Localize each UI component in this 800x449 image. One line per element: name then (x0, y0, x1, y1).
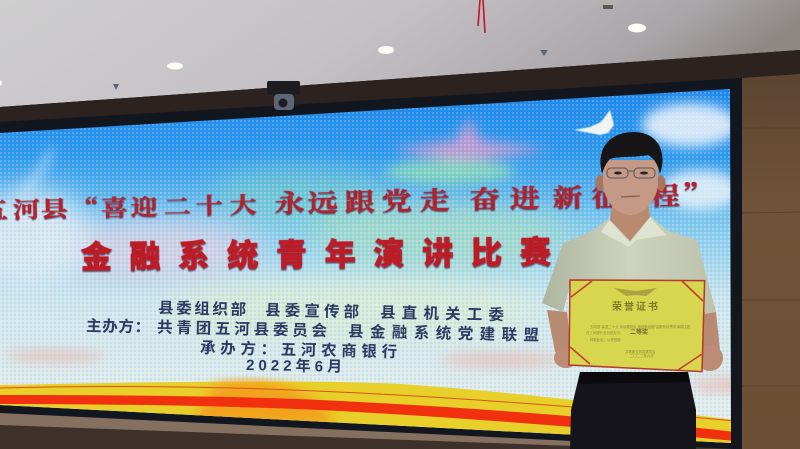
golden ribbons (0, 381, 735, 449)
host line: 主办方： (86, 316, 150, 336)
organisers line: 县直机关工委 (380, 304, 505, 324)
ears (596, 175, 604, 191)
wall right (742, 74, 800, 449)
organisers line: 县委组织部 (158, 298, 247, 319)
led dot pattern (0, 80, 735, 449)
red landscape (5, 349, 770, 393)
certificate corners (570, 281, 703, 370)
mouth (621, 196, 640, 197)
screen frame (0, 78, 742, 449)
projector (267, 81, 300, 110)
certificate emblem (614, 288, 657, 296)
forearms (547, 310, 572, 358)
certificate body (586, 324, 691, 358)
trousers (570, 372, 696, 449)
certificate heading: 荣誉证书 (612, 300, 658, 313)
screen title: 永远跟党走奋进新征程” (274, 174, 713, 219)
host line: 县金融系统党建联盟 (348, 321, 539, 344)
sprinklers (113, 50, 548, 90)
wooden beam (0, 50, 800, 125)
certificate body: 在工商银行五河县支行： (586, 330, 623, 335)
ceiling sensor (601, 0, 616, 9)
wall panel seams (742, 128, 800, 386)
host line (86, 318, 538, 342)
ceiling (0, 0, 800, 107)
organiser bank line: 承办方：五河农商银行 (200, 338, 397, 361)
certificate (569, 280, 705, 372)
face (603, 160, 658, 215)
wall below screen (0, 412, 742, 449)
red ribbon (478, 0, 485, 33)
hair (600, 132, 662, 174)
certificate body: 特发此证，以资鼓励 (590, 337, 621, 342)
shirt (542, 216, 716, 314)
glasses (607, 168, 655, 178)
eyes (614, 172, 648, 174)
certificate body: 二等奖 (630, 328, 648, 336)
certificate body: 五河县“喜迎二十大 永远跟党走 奋进新征程”金融系统青年演讲比赛 (590, 324, 691, 329)
neck (610, 200, 650, 241)
dove (574, 110, 614, 135)
clouds (22, 103, 740, 210)
host line: 共青团五河县委员会 (157, 317, 328, 340)
pink star glow (385, 118, 550, 184)
screen title (0, 182, 698, 222)
hands (554, 348, 578, 368)
person (542, 132, 723, 449)
certificate body: 二〇二二年六月 (630, 353, 654, 358)
LED screen (0, 80, 770, 449)
certificate body: 共青团五河县委员会 (625, 349, 656, 354)
screen subtitle: 金融系统青年演讲比赛 (81, 235, 551, 275)
belt (579, 372, 690, 384)
organisers line: 县委宣传部 (265, 300, 360, 321)
date line: 2022年6月 (246, 356, 342, 376)
organisers line (158, 300, 504, 322)
moire glow (0, 165, 570, 340)
ceiling lights (0, 24, 646, 86)
